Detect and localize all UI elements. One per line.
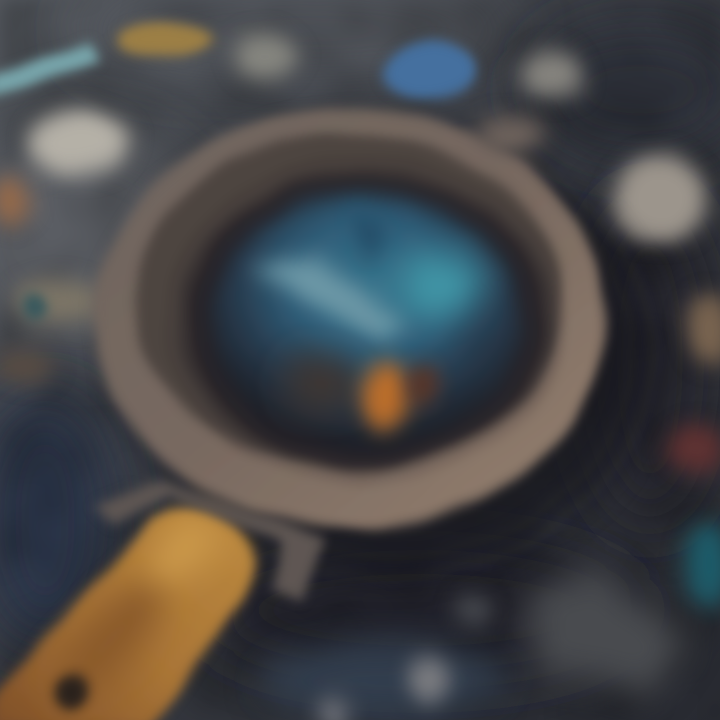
handle [0, 480, 325, 720]
magnifying glass [0, 108, 647, 720]
object: white disc [30, 110, 130, 174]
object: grey strips [525, 565, 690, 695]
object: blue disc [382, 44, 474, 100]
lens reflection: pale streak [250, 258, 410, 338]
object: bottom blue arc [260, 642, 510, 718]
lens orange flame [360, 360, 410, 428]
object: brown patch [0, 347, 55, 383]
handle highlight [139, 506, 231, 594]
object: small orange [0, 176, 32, 224]
handle hole [56, 673, 90, 707]
inner rim [134, 134, 562, 466]
ring [94, 108, 606, 528]
object: grey disc, lower [457, 594, 493, 630]
ring top tab [476, 115, 544, 155]
object: pale disc [233, 32, 297, 80]
lens dark streak [350, 215, 390, 270]
handle shading [39, 563, 181, 717]
lens [210, 194, 520, 450]
object: tan blob [688, 294, 720, 366]
object: teal dot [24, 296, 48, 320]
handle connector [95, 480, 325, 600]
lens reflection: teal glow [400, 251, 480, 319]
object: amber shape [117, 24, 213, 58]
inner well [181, 172, 549, 468]
object: bottom pale dot [408, 656, 452, 700]
object: grey disc [520, 51, 584, 99]
shadow [123, 128, 647, 572]
object: right white disc [614, 154, 706, 242]
object: teal strip [0, 42, 100, 98]
object: teal blob [684, 521, 720, 609]
object: beige strip [14, 280, 106, 324]
lens brown haze [280, 355, 360, 415]
object: red blob [663, 428, 720, 472]
